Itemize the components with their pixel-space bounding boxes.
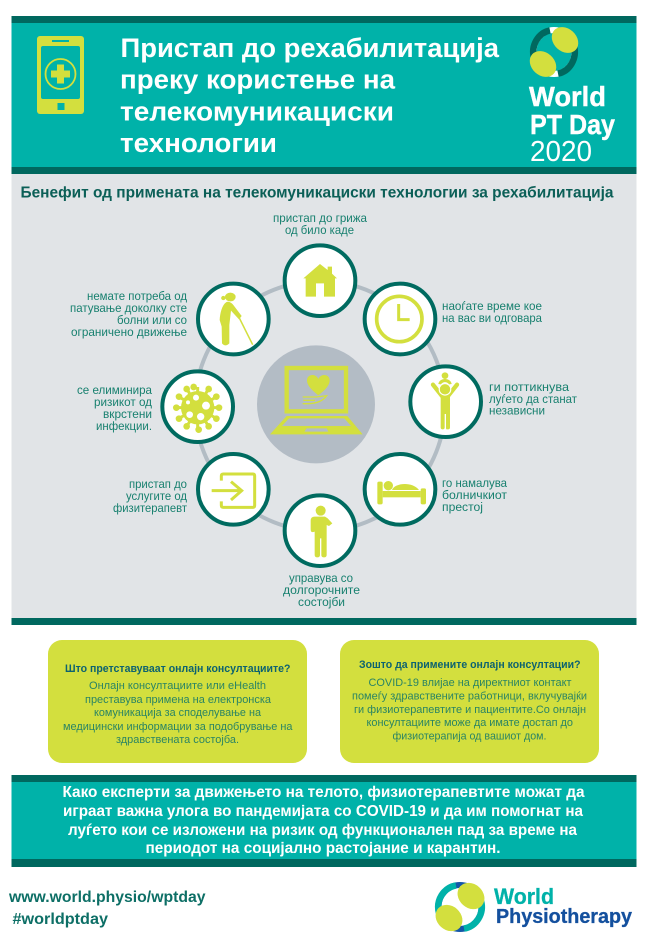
text block: reasons: консултациите може да имате достап до (366, 717, 573, 729)
text block: physiotherapists' role: Како експерти за движењето на телото, физиотерапевтите можат да (62, 784, 585, 801)
text block: physiotherapists' role (62, 784, 585, 857)
text block: physiotherapists' role: луѓето кои се изложени на ризик од функционален пад за време на (68, 822, 577, 839)
heading: why use online consultations: Зошто да примените онлајн консултации? (359, 659, 581, 671)
label: find a suitable time: наоѓате време кое (442, 299, 542, 313)
title (120, 33, 500, 158)
label: reduces hospital stay: го намалува (442, 476, 507, 490)
panel: call-out band (12, 775, 636, 867)
text block: definition: здравствената состојба. (116, 734, 239, 746)
label: care from anywhere: од било каде (285, 223, 354, 237)
icon: virus (162, 371, 233, 442)
icon: elderly woman with cane (198, 284, 269, 354)
label: access to physiotherapist: пристап до (129, 477, 187, 491)
icon: patient in bed (365, 454, 435, 525)
label: care from anywhere: пристап до грижа (273, 211, 367, 225)
diagram: connecting ring (195, 281, 445, 531)
text block: reasons: ги физиотерапевтите и пациентите.Со онлајн (354, 704, 586, 716)
label: care from anywhere (273, 211, 367, 237)
footer links: www.world.physio/wptday (8, 889, 206, 906)
label: reduces hospital stay (442, 476, 508, 514)
label: no need to travel: патување доколку сте (70, 301, 187, 315)
label: find a suitable time: на вас ви одговара (442, 311, 542, 325)
heading: benefits: Бенефит од примената на телекомуникациски технологии за рехабилитација (20, 184, 614, 202)
label: reduces hospital stay: болничкиот (442, 488, 508, 502)
panel: what are online consultations (48, 640, 307, 763)
panel: header banner (12, 16, 636, 174)
text block: reasons: физиотерапија од вашиот дом. (392, 730, 546, 742)
label: cross-infection risk: вкрстени (103, 407, 152, 421)
label: cross-infection risk: се елиминира (77, 383, 152, 397)
circles with icons (162, 245, 481, 566)
label: encourages independence (489, 380, 578, 418)
title: Пристап до рехабилитација (120, 33, 500, 63)
icon: phone with medical cross (37, 36, 84, 114)
icon: person lifting child (410, 366, 481, 437)
logo: World PT Day 2020 (525, 22, 615, 168)
panel: why use online consultations (340, 640, 599, 763)
icon: World PT Day emblem (525, 22, 583, 82)
footer links (8, 889, 206, 928)
label: encourages independence: луѓето да станат (489, 392, 578, 406)
text block: reasons: COVID-19 влијае на директниот контакт (368, 677, 572, 689)
logo: World Physiotherapy (430, 877, 633, 937)
panel: benefits diagram (12, 174, 636, 625)
text block: physiotherapists' role: играат важна улога во пандемијата со COVID-19 и да им помогнат на (63, 803, 583, 820)
label: access to physiotherapist: услугите од (126, 489, 187, 503)
icon: home (285, 245, 355, 316)
title: преку користење на (120, 64, 396, 94)
label: no need to travel: немате потреба од (87, 289, 187, 303)
label: manages long-term conditions (283, 571, 360, 609)
label: encourages independence: независни (489, 404, 545, 418)
heading: what are online consultations: Што претставуваат онлајн консултациите? (65, 663, 291, 675)
label: cross-infection risk: инфекции. (96, 419, 152, 433)
text block: reasons (352, 677, 587, 742)
label: cross-infection risk (77, 383, 152, 433)
logo: World PT Day 2020: PT Day (530, 109, 615, 140)
logo: World PT Day 2020: 2020 (530, 136, 592, 168)
logo: World Physiotherapy: Physiotherapy (496, 906, 633, 928)
text block: reasons: помеѓу здравствените работници, вклучувајќи (352, 690, 587, 702)
label: manages long-term conditions: управува со (289, 571, 353, 585)
title: технологии (120, 128, 277, 158)
label: no need to travel: болни или со (117, 313, 187, 327)
text block: definition: комуникација за споделување на (94, 707, 262, 719)
logo: World Physiotherapy: World (494, 884, 554, 909)
label: find a suitable time (442, 299, 542, 325)
logo: World PT Day 2020: World (529, 81, 606, 112)
icon: login arrow (198, 454, 269, 525)
label: access to physiotherapist (113, 477, 188, 515)
label: encourages independence: ги поттикнува (489, 380, 569, 394)
footer links: #worldptday (12, 911, 108, 928)
title: телекомуникациски (120, 96, 394, 126)
icon: World Physiotherapy emblem (430, 877, 490, 937)
label: cross-infection risk: ризикот од (94, 395, 152, 409)
text block: definition: преставува примена на електронска (85, 694, 272, 706)
label: no need to travel: ограничено движење (71, 325, 187, 339)
label: no need to travel (70, 289, 187, 339)
label: manages long-term conditions: долгорочните (283, 583, 360, 597)
text block: physiotherapists' role: периодот на социјално растојание и карантин. (146, 840, 500, 857)
icon: person with long-term condition (285, 495, 355, 566)
label: access to physiotherapist: физитерапевт (113, 501, 188, 515)
label: manages long-term conditions: состојби (298, 595, 345, 609)
text block: definition (63, 680, 293, 746)
label: reduces hospital stay: престој (442, 500, 483, 514)
text block: definition: Онлајн консултациите или eHealth (89, 680, 266, 692)
icon: clock (365, 284, 435, 354)
text block: definition: медицински информации за подобрување на (63, 721, 293, 733)
icon: laptop with heart in hand (257, 345, 375, 463)
